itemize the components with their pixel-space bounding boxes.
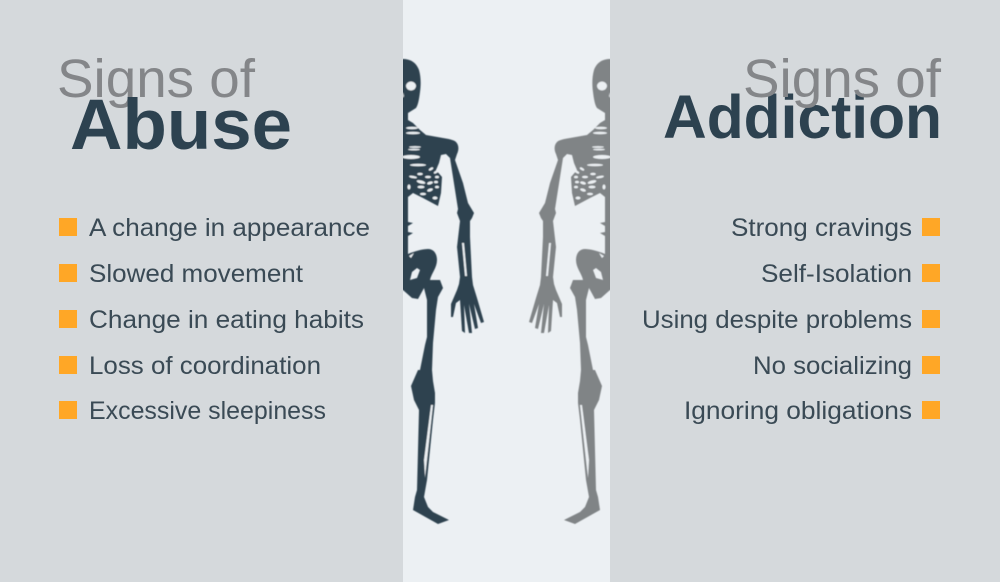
list: addiction signs: Strong cravings bbox=[731, 214, 912, 242]
heading: signs of addiction: Signs of bbox=[743, 49, 942, 109]
list: abuse signs bbox=[59, 214, 370, 425]
list: addiction signs: Self-Isolation bbox=[761, 260, 912, 288]
list: abuse signs: Change in eating habits bbox=[89, 306, 364, 334]
list: addiction signs: Using despite problems bbox=[642, 306, 912, 334]
heading: signs of abuse: Abuse bbox=[70, 86, 292, 165]
list: addiction signs: No socializing bbox=[753, 352, 912, 380]
skeleton half: dark, left bbox=[403, 58, 485, 525]
list: abuse signs: Excessive sleepiness bbox=[89, 397, 326, 425]
heading: signs of addiction bbox=[663, 49, 942, 151]
panel: signs of abuse bbox=[0, 0, 403, 582]
heading: signs of abuse bbox=[57, 49, 292, 165]
list: addiction signs bbox=[642, 214, 940, 425]
panel: signs of addiction bbox=[610, 0, 1000, 582]
heading: signs of addiction: Addiction bbox=[663, 83, 942, 151]
skeleton half: gray, right bbox=[528, 58, 610, 524]
bone gaps bbox=[402, 82, 467, 478]
list: abuse signs: A change in appearance bbox=[89, 214, 370, 242]
bone gaps, right bbox=[546, 82, 611, 478]
list: abuse signs: Loss of coordination bbox=[89, 352, 321, 380]
list: abuse signs: Slowed movement bbox=[89, 260, 303, 288]
heading: signs of abuse: Signs of bbox=[57, 49, 256, 109]
list: addiction signs: Ignoring obligations bbox=[684, 397, 912, 425]
